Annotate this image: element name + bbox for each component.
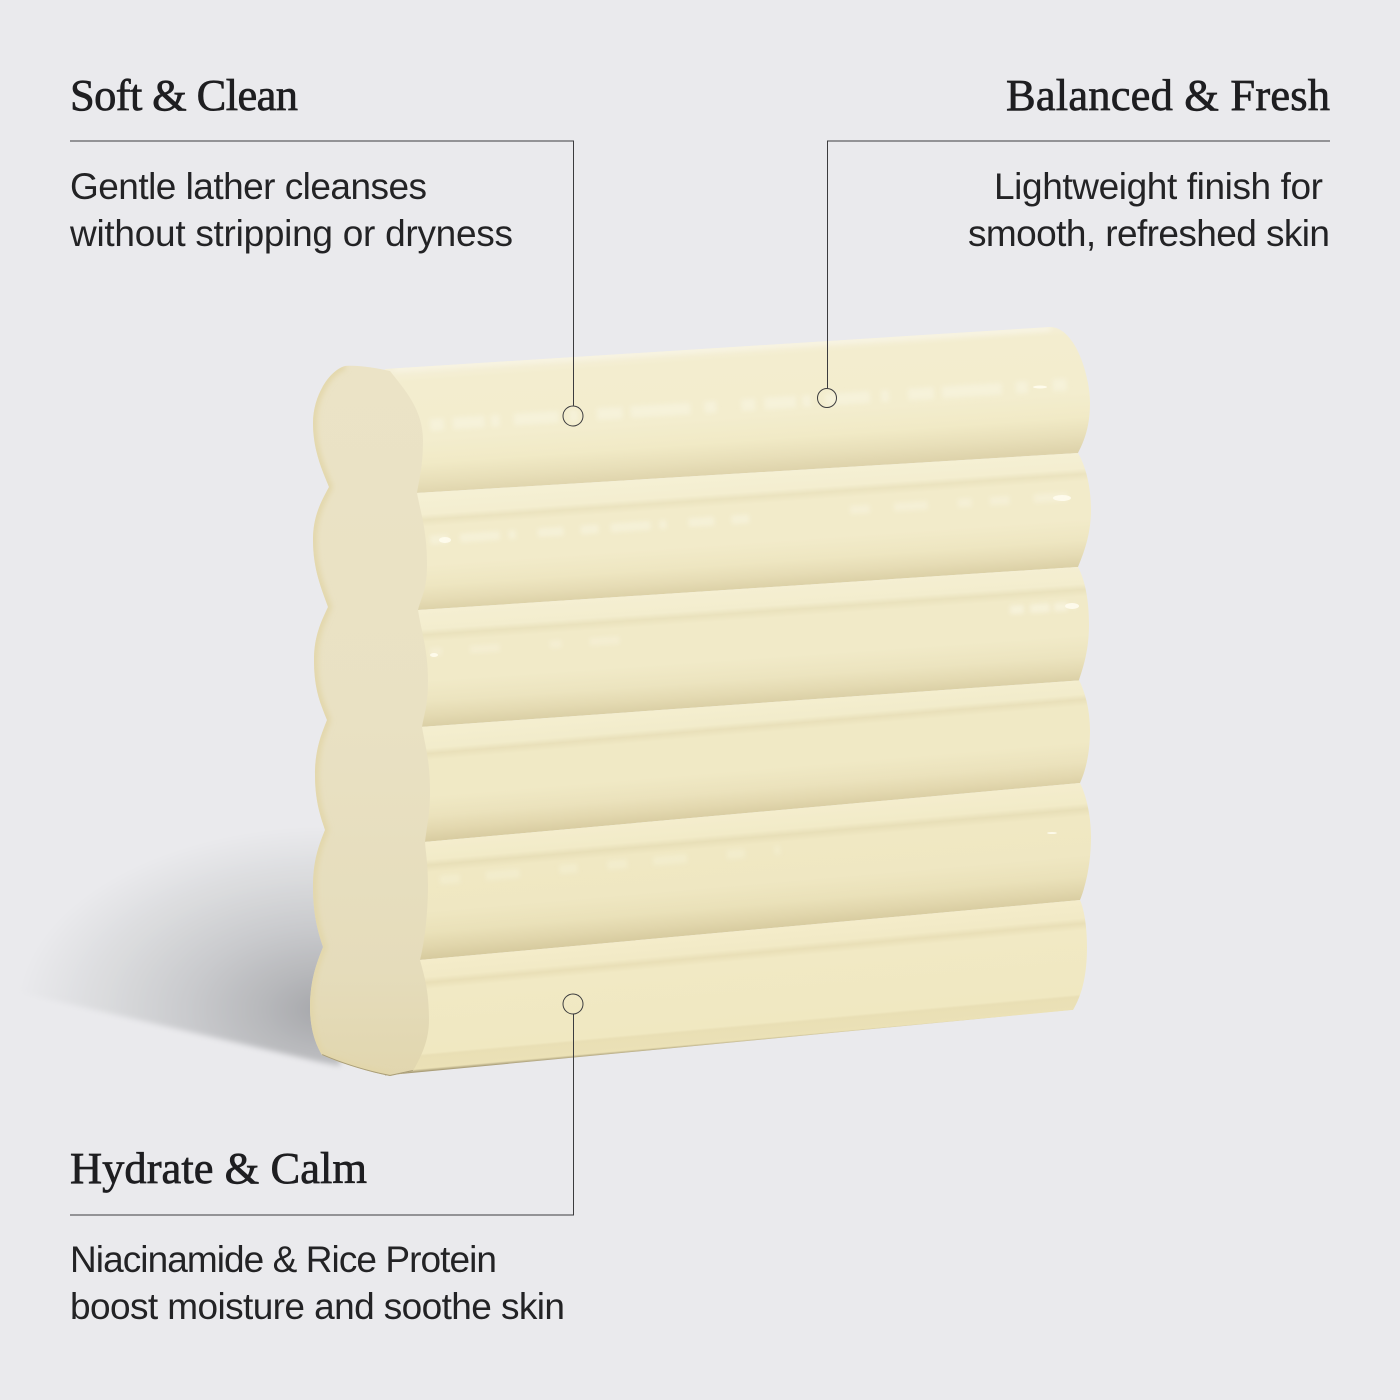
description: smooth, refreshed skin — [968, 213, 1330, 254]
soap bar — [300, 324, 1100, 1080]
heading: Hydrate & Calm: Hydrate & Calm — [70, 1143, 367, 1193]
soap end face — [310, 366, 430, 1076]
callout: Balanced & Fresh — [818, 70, 1330, 408]
leader line and marker — [70, 994, 583, 1215]
description: Gentle lather cleanses — [70, 166, 427, 207]
description — [69, 166, 513, 254]
leader line and marker — [818, 141, 1330, 408]
leader line and marker — [70, 141, 583, 426]
callout: Hydrate & Calm — [70, 994, 583, 1327]
description — [70, 1239, 565, 1327]
description: without stripping or dryness — [69, 213, 513, 254]
description: Lightweight finish for — [994, 166, 1323, 207]
soap front ridges — [380, 324, 1100, 1076]
cast shadow — [62, 854, 342, 1068]
description: Niacinamide & Rice Protein — [70, 1239, 497, 1280]
heading: Balanced & Fresh: Balanced & Fresh — [1006, 70, 1330, 120]
callout: Soft & Clean — [69, 70, 583, 426]
description — [968, 166, 1330, 254]
description: boost moisture and soothe skin — [70, 1286, 565, 1327]
heading: Soft & Clean: Soft & Clean — [70, 70, 298, 120]
